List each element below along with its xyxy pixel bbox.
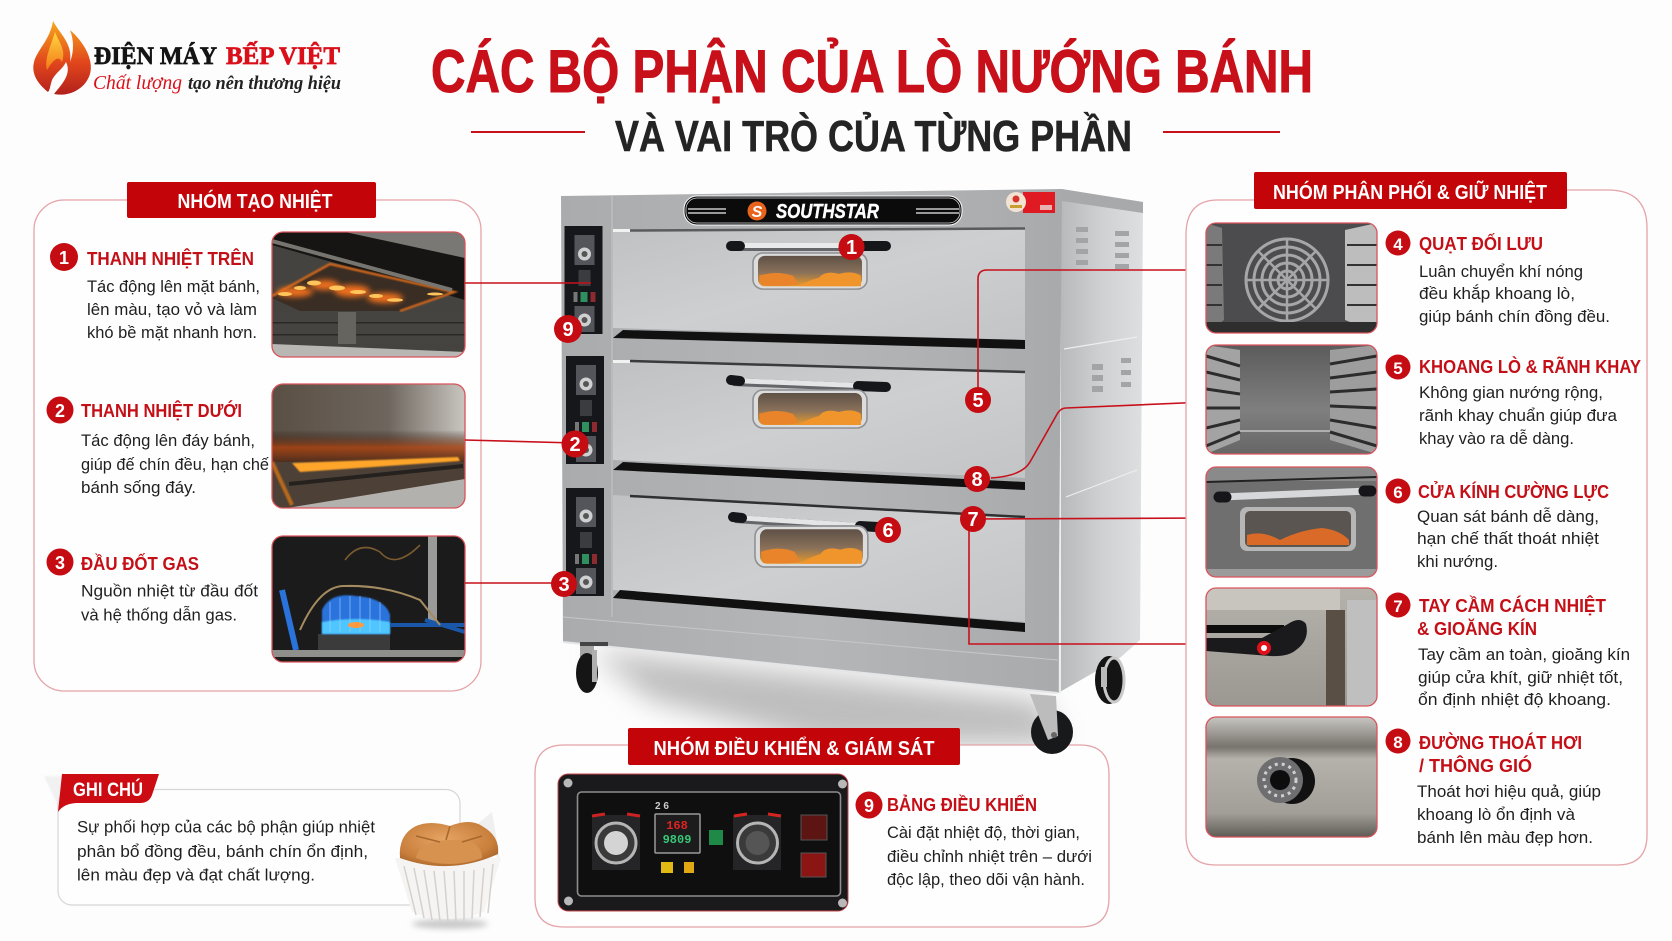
photo: tay cầm: [1206, 588, 1377, 706]
heading: nhóm phân phối: [1254, 172, 1567, 209]
door 3: [613, 495, 1025, 632]
control panel photo: 9809: [663, 833, 691, 847]
item 3: đầu đốt gas: 3: [55, 553, 65, 573]
item 8: đường thoát hơi: khoang lò ổn định và: [1417, 805, 1576, 824]
icon: flame: [33, 21, 91, 95]
item 5: khoang lò: Không gian nướng rộng,: [1419, 383, 1603, 402]
photo: khoang lò: [1206, 345, 1377, 454]
marker 2: [562, 430, 588, 458]
item 5: khoang lò: [1386, 354, 1642, 448]
marker 1: [838, 234, 864, 260]
item 2: thanh nhiệt dưới: [46, 396, 270, 497]
marker 8: 8: [971, 469, 983, 491]
item 8: đường thoát hơi: bánh lên màu đẹp hơn.: [1417, 828, 1593, 847]
line: item 3 to marker 3: [465, 582, 564, 584]
item 6: cửa kính: [1386, 478, 1609, 571]
item 7: tay cầm: Tay cầm an toàn, gioăng kín: [1418, 645, 1630, 664]
item 1: thanh nhiệt trên: THANH NHIỆT TRÊN: [87, 248, 254, 269]
heading: nhóm tạo nhiệt: [127, 182, 376, 218]
line: item 1 to marker 9: [465, 282, 591, 284]
item 1: thanh nhiệt trên: [50, 243, 260, 342]
item 5: khoang lò: 5: [1393, 359, 1403, 378]
marker 9: 9: [562, 319, 574, 341]
note tab: [44, 774, 159, 812]
title: CÁC BỘ PHẬN CỦA LÒ NƯỚNG BÁNH: [431, 38, 1313, 105]
nameplate: Southstar: [684, 196, 962, 225]
item 1: thanh nhiệt trên: lên màu, tạo vỏ và làm: [87, 300, 257, 319]
item 4: quạt đối lưu: [1386, 230, 1610, 326]
marker 6: [875, 517, 901, 543]
item 3: đầu đốt gas: ĐẦU ĐỐT GAS: [81, 553, 199, 574]
item 2: thanh nhiệt dưới: THANH NHIỆT DƯỚI: [81, 400, 242, 421]
photo: đường thoát hơi: [1206, 717, 1377, 837]
marker 9: [554, 315, 582, 343]
item 5: khoang lò: khay vào ra dễ dàng.: [1419, 429, 1574, 448]
heading: nhóm điều khiển: [628, 728, 960, 765]
item 8: đường thoát hơi: ĐƯỜNG THOÁT HƠI: [1419, 732, 1582, 753]
marker 7: 7: [967, 509, 979, 531]
note box: [58, 790, 460, 905]
subtitle: VÀ VAI TRÒ CỦA TỪNG PHẦN: [615, 110, 1132, 161]
certificate sticker: [1006, 192, 1055, 213]
nameplate: Southstar: SOUTHSTAR: [776, 201, 879, 223]
item 4: quạt đối lưu: đều khắp khoang lò,: [1419, 284, 1575, 303]
item 6: cửa kính: 6: [1393, 483, 1403, 502]
brand name: ĐIỆN MÁY: [94, 42, 217, 70]
slogan: Chất lượng: [93, 72, 182, 94]
heading: nhóm tạo nhiệt: NHÓM TẠO NHIỆT: [178, 189, 332, 213]
logo: Điện Máy Bếp Việt: [33, 21, 341, 95]
item 3: đầu đốt gas: và hệ thống dẫn gas.: [81, 606, 237, 624]
item 5: khoang lò: rãnh khay chuẩn giúp đưa: [1419, 406, 1618, 425]
note text: lên màu đẹp và đạt chất lượng.: [77, 866, 315, 884]
line: khoang to marker 8: [991, 402, 1206, 478]
marker 8: [964, 466, 990, 492]
item 7: tay cầm: TAY CẦM CÁCH NHIỆT: [1419, 595, 1607, 616]
item 3: đầu đốt gas: [46, 548, 258, 624]
oven side: [1058, 189, 1143, 693]
logo: Điện Máy Bếp Việt: BẾP VIỆT: [226, 41, 340, 70]
item 7: tay cầm: giúp cửa khít, giữ nhiệt tốt,: [1418, 668, 1623, 687]
castor: front left: [576, 642, 608, 693]
item 4: quạt đối lưu: giúp bánh chín đồng đều.: [1419, 307, 1610, 326]
item 2: thanh nhiệt dưới: giúp đế chín đều, hạn chế: [81, 455, 270, 474]
control panel photo: 168: [666, 819, 688, 833]
note text: phân bổ đồng đều, bánh chín ổn định,: [77, 842, 368, 861]
item 9: bảng điều khiển: [856, 792, 1092, 889]
item 3: đầu đốt gas: Nguồn nhiệt từ đầu đốt: [81, 582, 258, 600]
castor: front right: [1030, 694, 1073, 754]
oven shadow: [590, 650, 1060, 745]
item 5: khoang lò: KHOANG LÒ & RÃNH KHAY: [1419, 356, 1642, 377]
oven markers: [551, 234, 991, 597]
item 7: tay cầm: [1386, 592, 1630, 709]
panel: nhóm điều khiển và giám sát: [535, 728, 1109, 927]
note text: [77, 818, 375, 884]
line: tay cầm to marker 7: [969, 519, 1206, 644]
castor: back right: [1095, 656, 1124, 704]
item 6: cửa kính: khi nướng.: [1417, 552, 1498, 571]
item 9: bảng điều khiển: Cài đặt nhiệt độ, thời gian,: [887, 823, 1080, 842]
item 2: thanh nhiệt dưới: bánh sống đáy.: [81, 478, 196, 497]
marker 7: [960, 506, 986, 532]
item 2: thanh nhiệt dưới: Tác động lên đáy bánh,: [81, 431, 255, 450]
note: ghi chú: [44, 774, 501, 929]
line: item 2 to marker 2: [465, 440, 575, 443]
item 4: quạt đối lưu: QUẠT ĐỐI LƯU: [1419, 233, 1543, 254]
heading: nhóm phân phối: NHÓM PHÂN PHỐI & GIỮ NHIỆT: [1273, 180, 1547, 204]
door 1: [613, 228, 1025, 349]
item 9: bảng điều khiển: điều chỉnh nhiệt trên – dưới: [887, 847, 1092, 866]
item 9: bảng điều khiển: 9: [864, 796, 874, 816]
control panel photo: 2 6: [655, 801, 669, 812]
logo: Điện Máy Bếp Việt: tạo nên thương hiệu: [188, 73, 341, 94]
item 4: quạt đối lưu: 4: [1393, 235, 1403, 254]
item 9: bảng điều khiển: BẢNG ĐIỀU KHIỂN: [887, 794, 1037, 815]
marker 3: [551, 571, 577, 597]
control strip 1: [564, 226, 602, 334]
item 9: bảng điều khiển: độc lập, theo dõi vận hành.: [887, 870, 1085, 889]
item 6: cửa kính: CỬA KÍNH CƯỜNG LỰC: [1418, 481, 1609, 502]
line: quạt to marker 5: [978, 270, 1206, 400]
note text: Sự phối hợp của các bộ phận giúp nhiệt: [77, 818, 375, 836]
item 8: đường thoát hơi: 8: [1393, 733, 1403, 752]
marker 5: 5: [972, 390, 984, 412]
marker 2: 2: [569, 434, 581, 456]
marker 6: 6: [882, 520, 894, 542]
oven front body: [561, 189, 1062, 693]
marker 1: 1: [846, 237, 857, 259]
item 1: thanh nhiệt trên: Tác động lên mặt bánh,: [87, 277, 260, 296]
connector lines: [465, 270, 1206, 644]
panel: nhóm phân phối và giữ nhiệt: [1186, 172, 1647, 865]
item 6: cửa kính: hạn chế thất thoát nhiệt: [1417, 529, 1599, 548]
note tab: GHI CHÚ: [73, 779, 143, 801]
item 1: thanh nhiệt trên: khó bề mặt nhanh hơn.: [87, 323, 257, 342]
item 1: thanh nhiệt trên: 1: [59, 248, 69, 268]
item 2: thanh nhiệt dưới: 2: [55, 401, 65, 421]
item 7: tay cầm: 7: [1393, 597, 1403, 616]
photo: đầu đốt gas: [272, 536, 465, 662]
item 7: tay cầm: ổn định nhiệt độ khoang.: [1418, 690, 1611, 709]
oven illustration: [561, 189, 1143, 745]
item 4: quạt đối lưu: Luân chuyển khí nóng: [1419, 262, 1583, 281]
photo: thanh nhiệt trên: [272, 232, 465, 357]
panel: nhóm tạo nhiệt: [34, 182, 481, 691]
control strip 2: [566, 356, 604, 464]
marker 5: [965, 387, 991, 413]
item 8: đường thoát hơi: [1386, 728, 1601, 847]
item 8: đường thoát hơi: Thoát hơi hiệu quả, giúp: [1417, 782, 1601, 801]
marker 3: 3: [558, 574, 570, 596]
line: cửa kính to marker 7: [973, 518, 1206, 519]
item 6: cửa kính: Quan sát bánh dễ dàng,: [1417, 507, 1599, 526]
photo: quạt đối lưu: [1206, 223, 1377, 333]
heading: nhóm điều khiển: NHÓM ĐIỀU KHIỂN & GIÁM SÁT: [654, 736, 934, 760]
item 7: tay cầm: & GIOĂNG KÍN: [1417, 618, 1537, 639]
photo: cửa kính: [1206, 467, 1377, 577]
door 2: [613, 360, 1025, 490]
photo: thanh nhiệt dưới: [272, 384, 465, 508]
icon: muffin: [395, 812, 501, 929]
item 8: đường thoát hơi: / THÔNG GIÓ: [1419, 755, 1532, 776]
control strip 3: [566, 488, 604, 596]
control panel photo: [558, 774, 848, 911]
nameplate: Southstar: S: [752, 204, 763, 221]
